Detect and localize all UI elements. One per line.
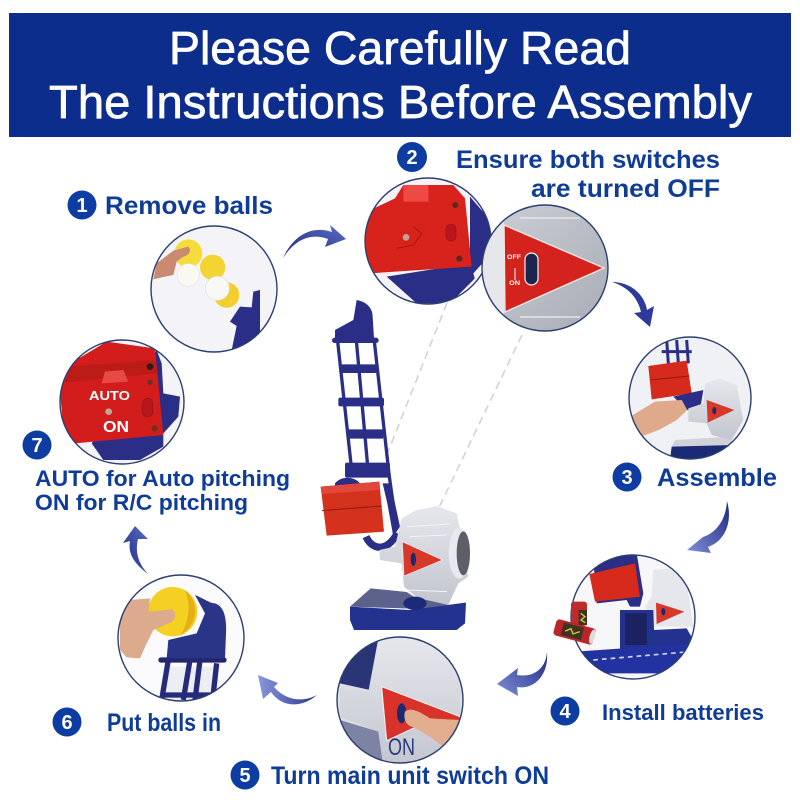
arrow: step 6 to 7	[123, 526, 148, 574]
step 2 label line 2: are turned OFF	[531, 175, 720, 203]
switch marking OFF: OFF	[507, 254, 521, 261]
step 6 label: Put balls in	[107, 709, 221, 737]
arrow: step 2 to 3	[612, 282, 654, 327]
step 4 badge: 4	[559, 701, 571, 723]
step 5 badge: 5	[239, 765, 251, 787]
feed tube	[335, 478, 400, 537]
step 1 photo: removing balls	[150, 225, 280, 355]
ON marking: ON	[103, 419, 129, 436]
step 2 label line 1: Ensure both switches	[456, 146, 720, 174]
step 4	[550, 553, 764, 726]
step 5 label: Turn main unit switch ON	[271, 762, 549, 790]
step 2	[360, 142, 720, 333]
dashed guide lines	[388, 303, 522, 547]
barrel	[449, 528, 470, 579]
step 3	[612, 335, 777, 492]
step 2 badge	[397, 142, 427, 172]
step 3 photo: assembling	[625, 335, 755, 463]
AUTO marking: AUTO	[89, 388, 130, 403]
arrow: step 3 to 4	[687, 501, 729, 553]
step 2 photo: motor box switch	[364, 177, 492, 305]
step 3 badge	[612, 462, 642, 492]
ladder rungs	[332, 338, 390, 478]
step 7 badge: 7	[31, 435, 43, 457]
arrow: step 5 to 6	[258, 675, 317, 704]
step 4 label: Install batteries	[602, 700, 764, 725]
header banner	[9, 13, 791, 137]
base top	[350, 588, 466, 610]
step 7 label line 1: AUTO for Auto pitching	[35, 466, 290, 491]
step 5 photo: turning switch on	[335, 636, 467, 770]
step 6 badge	[52, 708, 82, 736]
red motor box	[321, 482, 384, 536]
heading line 2: The Instructions Before Assembly	[49, 76, 752, 128]
arrow: step 4 to 5	[497, 652, 547, 696]
step 6 photo: putting balls in	[115, 573, 247, 703]
step 6 badge: 6	[61, 712, 73, 734]
step 4 photo: batteries	[553, 553, 698, 681]
red triangle label	[402, 542, 442, 576]
step 2 photo: main unit switch OFF	[480, 203, 610, 333]
arrow: step 1 to 2	[283, 225, 346, 258]
step 1 badge	[68, 190, 96, 220]
heading line 1: Please Carefully Read	[169, 22, 631, 74]
step 1	[68, 190, 280, 355]
step 7 label line 2: ON for R/C pitching	[35, 490, 248, 515]
step 2 badge: 2	[406, 147, 418, 169]
step 1 badge: 1	[76, 195, 88, 217]
main unit body	[379, 506, 468, 605]
step 3 badge: 3	[621, 467, 633, 489]
step 3 label: Assemble	[657, 464, 777, 492]
switch marking ON: ON	[509, 280, 520, 287]
step 6	[52, 573, 247, 737]
ladder rails	[337, 337, 395, 517]
step 1 label: Remove balls	[105, 192, 273, 220]
step 5 badge	[230, 760, 260, 790]
batteries	[553, 602, 597, 645]
central pitching machine	[321, 300, 470, 630]
base front	[350, 603, 466, 630]
chute top	[335, 300, 374, 340]
step 7 badge	[22, 430, 52, 460]
step 4 badge	[550, 696, 580, 726]
step 5	[230, 636, 549, 790]
ON marking: ON	[388, 734, 415, 761]
step 7 photo: AUTO and ON switch	[58, 338, 188, 466]
step 7	[22, 338, 290, 515]
